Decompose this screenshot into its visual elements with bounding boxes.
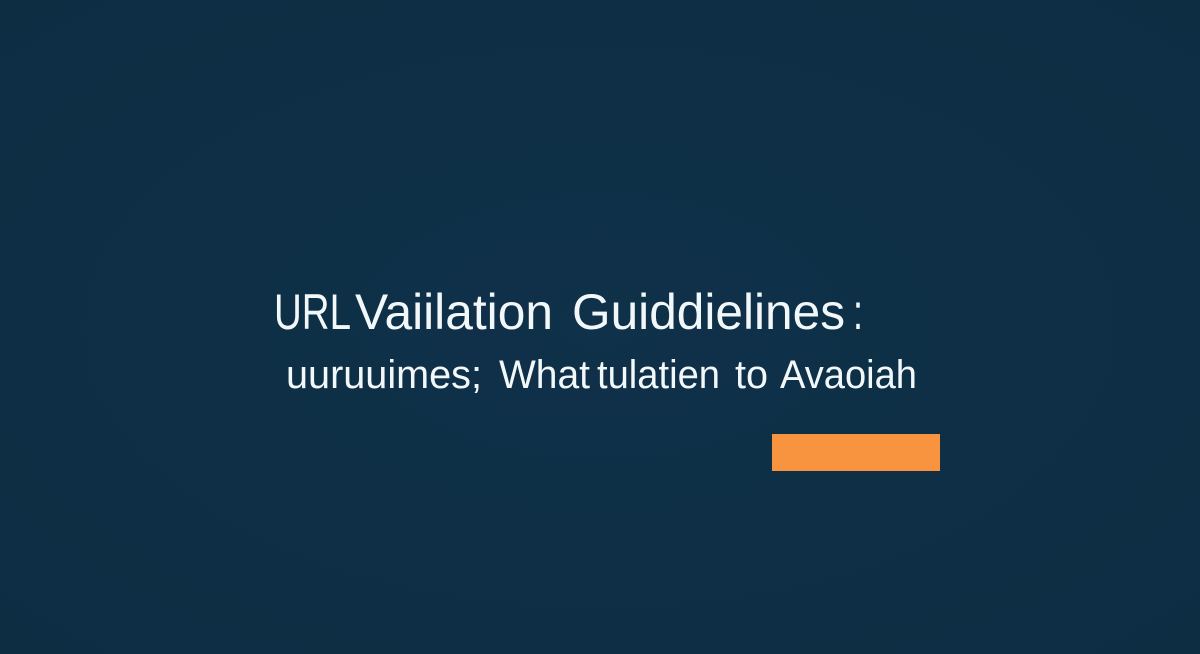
orange accent bar [772,434,940,471]
subtitle: Avaoiah [780,353,917,397]
title: Vaiilation [355,284,553,340]
subtitle: to [735,353,768,397]
title: Guiddielines [572,284,845,340]
title [274,284,863,340]
subtitle: tulatien [597,353,720,397]
subtitle [286,353,917,397]
title: : [853,284,863,340]
subtitle: What [499,353,590,397]
title: URL [274,284,351,340]
subtitle: uuruuimes; [286,353,482,397]
